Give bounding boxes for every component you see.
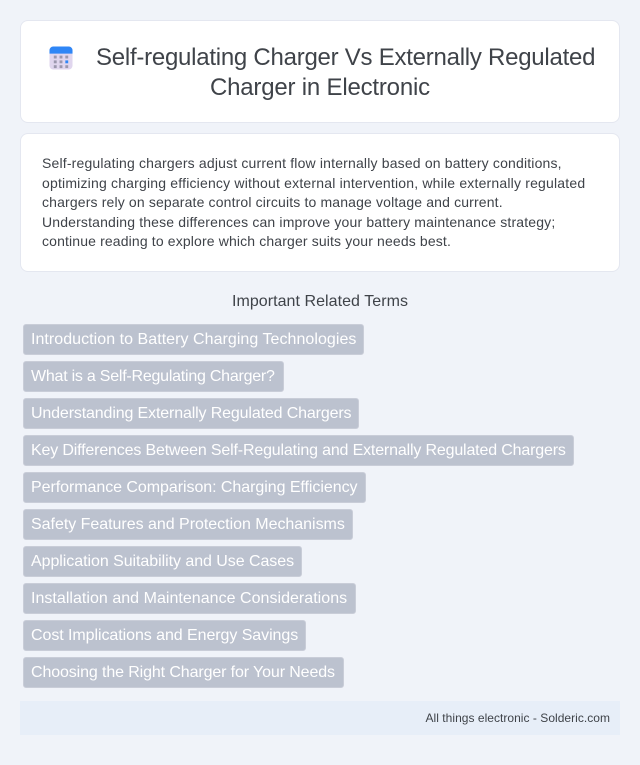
term 10 [23,657,344,688]
term 5 [23,472,366,503]
title: Charger in Electronic [210,74,430,101]
term 4: Key Differences Between Self-Regulating and Externally Regulated Chargers [31,442,566,459]
term 3 [23,398,359,429]
text block: introduction [42,155,585,249]
panel: title card [20,20,620,123]
term 6: Safety Features and Protection Mechanisms [31,516,345,533]
term 1 [23,324,364,355]
footer credit: All things electronic - Solderic.com [426,711,610,725]
text block: introduction: chargers rely on separate control circuits to manage voltage and current. [42,194,503,210]
panel: introduction [20,133,620,272]
term 7 [23,546,302,577]
term 7: Application Suitability and Use Cases [31,553,294,570]
title: Self-regulating Charger Vs Externally Regulated [96,44,595,71]
term 2 [23,361,284,392]
term 9 [23,620,306,651]
heading: related terms: Important Related Terms [232,293,408,310]
term 1: Introduction to Battery Charging Technologies [31,331,356,348]
text block: introduction: continue reading to explore which charger suits your needs best. [42,233,451,249]
term 8 [23,583,356,614]
footer [20,701,620,735]
term 8: Installation and Maintenance Considerations [31,590,347,607]
icon: calendar [49,46,73,70]
term 2: What is a Self-Regulating Charger? [31,368,275,385]
term 3: Understanding Externally Regulated Chargers [31,405,351,422]
title [96,44,595,101]
term 6 [23,509,353,540]
text block: introduction: Understanding these differences can improve your battery maintenance strategy; [42,214,555,230]
term 4 [23,435,574,466]
term 10: Choosing the Right Charger for Your Needs [31,664,335,681]
text block: introduction: optimizing charging efficiency without external intervention, while externally regulated [42,175,585,191]
list: related terms [23,324,574,688]
text block: introduction: Self-regulating chargers adjust current flow internally based on battery conditions, [42,155,562,171]
term 9: Cost Implications and Energy Savings [31,627,298,644]
term 5: Performance Comparison: Charging Efficiency [31,479,357,496]
